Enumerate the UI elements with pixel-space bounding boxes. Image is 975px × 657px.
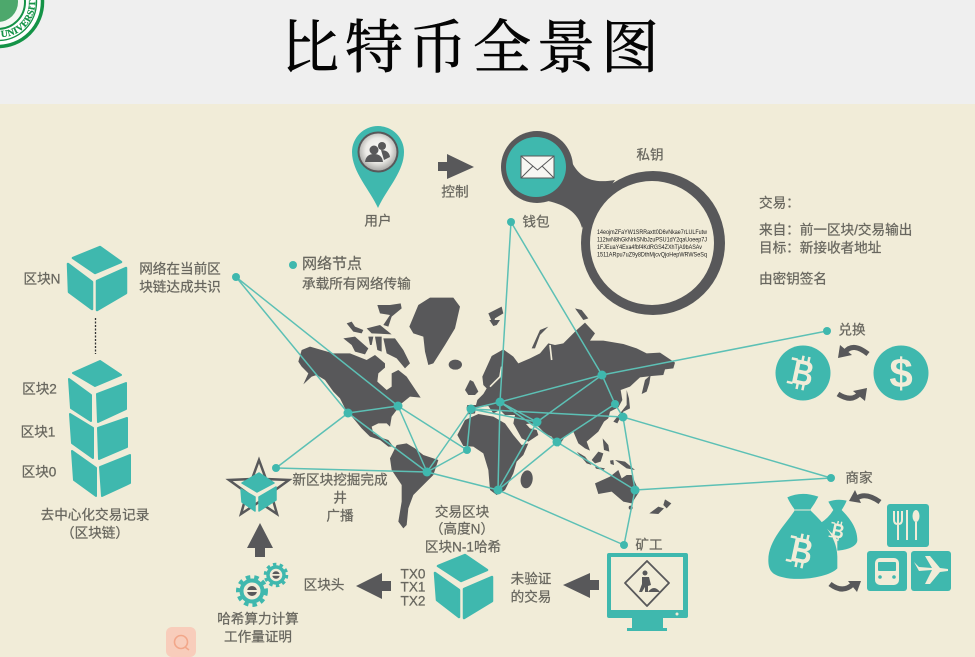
wallet and private key — [501, 131, 725, 315]
icon: plane tile — [911, 551, 951, 591]
icon: money bags: B — [787, 530, 817, 572]
label: hash computation: 哈希算力计算 — [217, 612, 299, 626]
icon: bitcoin coin — [776, 346, 830, 400]
icon: gears — [238, 565, 286, 604]
arrow: control — [438, 154, 474, 179]
icon: money bags — [768, 494, 857, 579]
label: transaction block: （高度N） — [430, 520, 494, 536]
icon: dollar coin: $ — [889, 350, 913, 396]
label: new block broadcast: 广播 — [326, 508, 354, 524]
private key text — [597, 230, 708, 258]
label: decentralised ledger: （区块链） — [61, 526, 129, 540]
label: block N: 区块N — [23, 272, 61, 286]
label: decentralised ledger — [41, 506, 149, 540]
private key text: 14eojmZFaYW1SRRaxtt0D6vNkae7rLULFutw — [597, 230, 708, 236]
label: user: 用户 — [364, 212, 392, 228]
title: 比特币全景图 — [281, 16, 665, 80]
label: hash computation: 工作量证明 — [224, 630, 292, 644]
chain dots — [94, 318, 96, 354]
label: hash computation — [217, 612, 299, 644]
arrow: up to new block — [247, 523, 273, 557]
transaction text: 来自：前一区块/交易输出 — [759, 222, 912, 238]
labels: block numbers: 区块2 — [22, 382, 57, 396]
labels: block numbers: 区块0 — [22, 464, 57, 480]
arrow: merchant bottom — [830, 581, 861, 592]
label: transaction list: TX1 — [401, 580, 425, 594]
heading: network nodes — [302, 256, 411, 292]
icon: bus tile — [867, 551, 907, 591]
label: transaction block: 区块N-1哈希 — [425, 540, 501, 554]
label: new block broadcast: 井 — [333, 490, 347, 506]
heading: network nodes: 网络节点 — [302, 256, 362, 272]
icon: block N cube — [68, 247, 126, 310]
icon: transaction block cube — [435, 555, 492, 618]
network lines — [236, 222, 831, 545]
icon: block stack — [69, 361, 130, 496]
transaction text — [759, 194, 912, 286]
world map — [298, 298, 675, 528]
labels: block numbers: 区块1 — [21, 424, 55, 440]
label: private key: 私钥 — [636, 148, 664, 162]
arrow: block to header — [356, 573, 391, 599]
arrow: exchange bottom — [838, 388, 867, 401]
label: transaction list — [401, 566, 426, 608]
label: new block broadcast: 新区块挖掘完成 — [292, 472, 388, 488]
label: transaction list: TX2 — [401, 594, 425, 608]
map: Americas and Greenland — [298, 298, 462, 528]
arrow: merchant top — [849, 490, 880, 503]
label: miner: 矿工 — [635, 538, 663, 552]
transaction text: 由密钥签名 — [759, 270, 827, 286]
icon: envelope — [521, 156, 554, 178]
label: transaction list: TX0 — [401, 566, 426, 582]
label: control: 控制 — [441, 184, 469, 200]
label: consensus: 网络在当前区 — [139, 260, 221, 276]
label: wallet: 钱包 — [522, 214, 550, 230]
label: transaction block — [425, 504, 501, 554]
transaction text: 交易： — [759, 194, 800, 210]
label: unverified transactions: 未验证 — [511, 572, 552, 586]
icon: miner monitor — [607, 553, 688, 631]
icon: star with cube — [229, 460, 289, 514]
label: new block broadcast — [292, 472, 388, 524]
label: decentralised ledger: 去中心化交易记录 — [41, 506, 149, 522]
arrow: miner to unverified — [563, 573, 599, 598]
map: Eurasia and Africa — [457, 320, 675, 495]
label: exchange: 兑换 — [838, 322, 866, 338]
label: merchant: 商家 — [845, 470, 873, 486]
transaction text: 目标：新接收者地址 — [759, 240, 882, 256]
icon: dollar coin — [874, 346, 928, 400]
network nodes — [232, 218, 835, 549]
title bar — [0, 0, 975, 104]
private key text: 112twN8hGkNrkSNbJzuPSU1dY2qaUoeep7J — [597, 238, 707, 244]
map: Arctic islands — [488, 307, 588, 325]
label: consensus — [139, 260, 221, 294]
labels: block numbers — [21, 382, 57, 480]
label: transaction block: 交易区块 — [435, 504, 490, 520]
private key text: 1FJEuaY4Exa4fbf4KdRGS4ZXhTjA9bASAv — [597, 245, 702, 251]
icon: search button — [166, 627, 196, 657]
map: East Asia islands and Oceania — [577, 375, 671, 514]
icon: bitcoin coin: B — [788, 352, 818, 394]
icon: money bags: B — [830, 519, 846, 543]
icon: cutlery tile — [887, 504, 929, 547]
arrow: exchange top — [838, 345, 868, 358]
label: block header: 区块头 — [304, 578, 344, 592]
icon: user pin — [352, 126, 404, 208]
private key text: 1511ARpu7uZ9y8DthMjcvQjoHepWRWSeSq — [597, 252, 707, 258]
label: unverified transactions — [511, 572, 552, 604]
label: unverified transactions: 的交易 — [511, 588, 551, 604]
label: consensus: 块链达成共识 — [139, 280, 221, 294]
heading: network nodes: 承载所有网络传输 — [302, 276, 411, 292]
